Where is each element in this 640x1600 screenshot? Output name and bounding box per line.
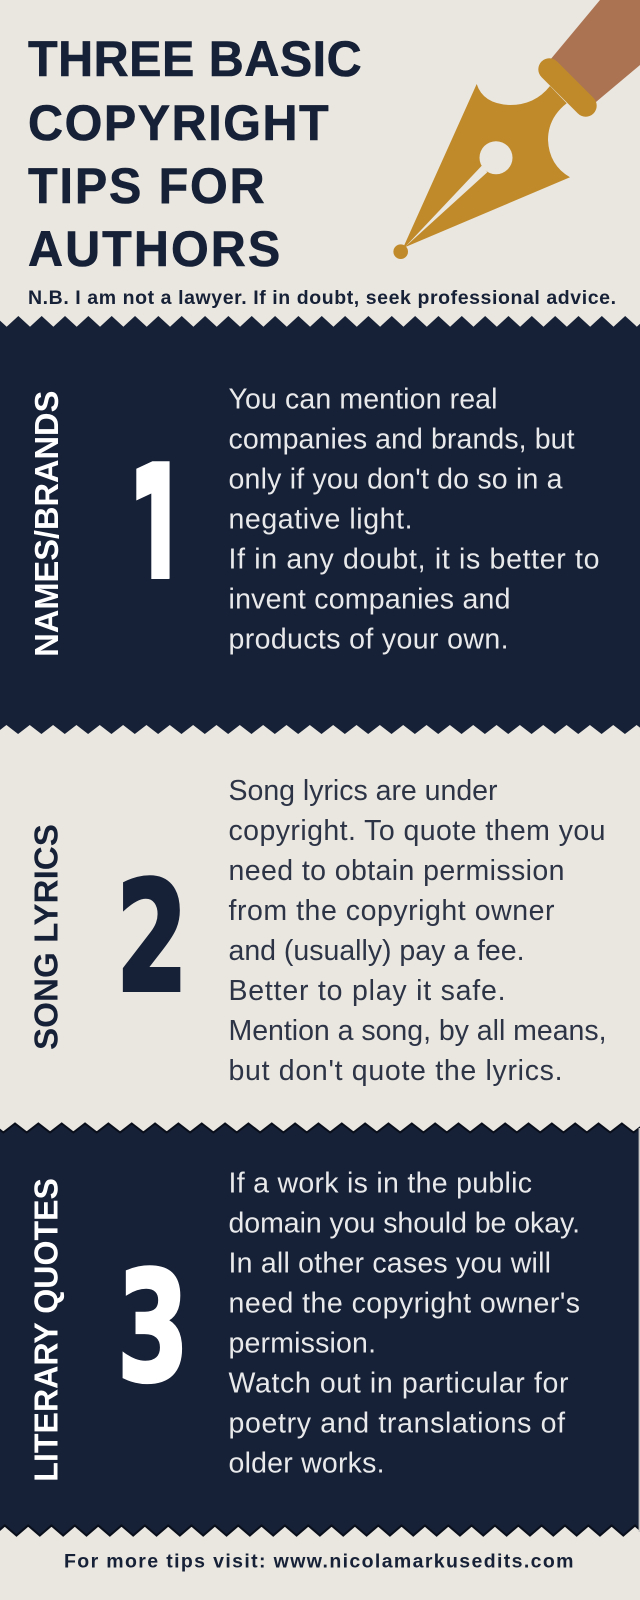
text block: literary quotes tip: need the copyright owner's — [228, 1288, 580, 1320]
text block: song lyrics tip: Song lyrics are under — [228, 775, 498, 807]
title: TIPS FOR — [28, 158, 265, 214]
number 2: 2 — [116, 848, 188, 1026]
text block: names/brands tip: You can mention real — [228, 383, 498, 415]
title: THREE BASIC — [28, 31, 362, 87]
text block: song lyrics tip: and (usually) pay a fee. — [228, 935, 524, 967]
number 3: 3 — [117, 1238, 189, 1416]
text block: song lyrics tip: copyright. To quote them you — [228, 815, 606, 847]
text block: song lyrics tip: Better to play it safe. — [228, 975, 506, 1007]
text block: song lyrics tip: need to obtain permission — [228, 855, 564, 887]
text block: song lyrics tip: from the copyright owner — [228, 895, 555, 927]
text block: names/brands tip: If in any doubt, it is better to — [228, 543, 600, 575]
text block: song lyrics tip — [228, 775, 606, 1087]
text block: literary quotes tip — [228, 1168, 580, 1480]
icon: fountain pen — [393, 0, 640, 259]
text block: names/brands tip: only if you don't do so in a — [228, 463, 563, 495]
text block: names/brands tip: negative light. — [228, 503, 412, 535]
text block: literary quotes tip: Watch out in particular for — [228, 1368, 569, 1400]
text block: literary quotes tip: In all other cases you will — [228, 1248, 551, 1280]
text block: literary quotes tip: domain you should be okay. — [228, 1208, 580, 1240]
title: COPYRIGHT — [28, 95, 329, 151]
label: song lyrics: SONG LYRICS — [28, 824, 64, 1050]
text block: song lyrics tip: Mention a song, by all means, — [228, 1015, 606, 1047]
panel: names/brands — [0, 316, 640, 734]
text block: literary quotes tip: permission. — [228, 1328, 376, 1360]
disclaimer note: N.B. I am not a lawyer. If in doubt, seek professional advice. — [28, 287, 616, 309]
number 1: 1 — [128, 426, 189, 658]
panel: literary quotes — [0, 1124, 640, 1536]
text block: literary quotes tip: older works. — [228, 1448, 384, 1480]
title: AUTHORS — [28, 221, 280, 277]
text block: literary quotes tip: If a work is in the public — [228, 1168, 532, 1200]
text block: song lyrics tip: but don't quote the lyrics. — [228, 1055, 562, 1087]
text block: names/brands tip: invent companies and — [228, 583, 510, 615]
text block: literary quotes tip: poetry and translations of — [228, 1408, 565, 1440]
footer link: For more tips visit: www.nicolamarkusedits.com — [64, 1551, 574, 1573]
label: literary quotes: LITERARY QUOTES — [28, 1178, 64, 1482]
text block: names/brands tip — [228, 383, 600, 655]
label: names/brands: NAMES/BRANDS — [28, 391, 65, 657]
panel: song lyrics — [28, 775, 606, 1087]
text block: names/brands tip: products of your own. — [228, 623, 508, 655]
text block: names/brands tip: companies and brands, but — [228, 423, 575, 455]
title — [28, 31, 362, 277]
